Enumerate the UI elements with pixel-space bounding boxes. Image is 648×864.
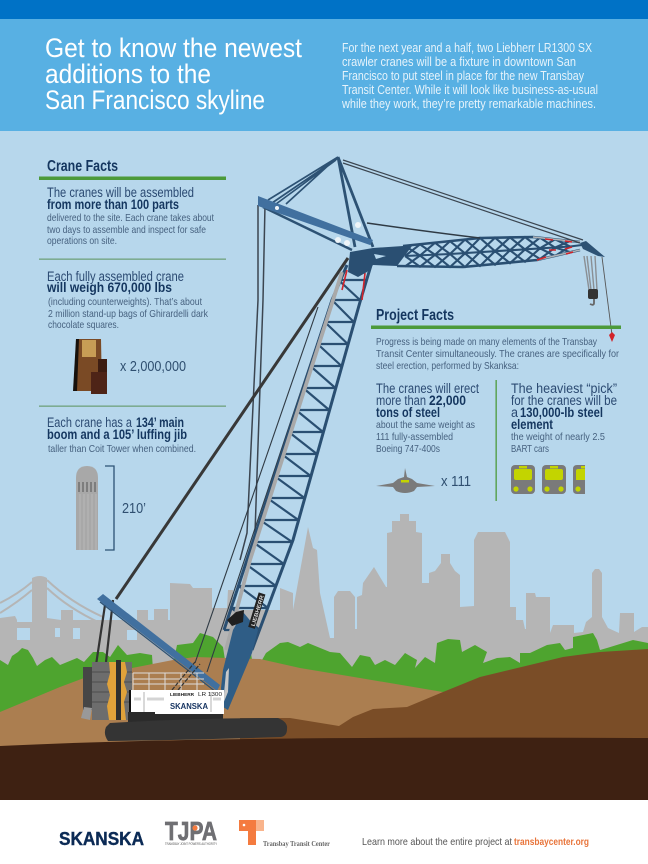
fact: tons of steel <box>376 381 479 455</box>
jib silver chords <box>533 237 580 260</box>
fact: tons of steel: more than <box>376 393 426 408</box>
jib tip <box>580 241 605 257</box>
jib red accents <box>537 239 590 260</box>
heading rule <box>371 326 621 329</box>
title <box>45 33 302 115</box>
fact: weight: 2 million stand-up bags of Ghirardelli dark <box>48 308 209 320</box>
project intro: steel erection, performed by Skanksa: <box>376 360 519 372</box>
heading rule <box>39 176 226 180</box>
header panel <box>0 19 648 131</box>
spreader underside <box>100 602 216 692</box>
ground: dark soil <box>0 738 648 801</box>
crane body: SKANSKA <box>170 702 208 711</box>
boom guy lines <box>195 307 328 672</box>
boom maker label <box>248 592 266 629</box>
title: San Francisco skyline <box>45 85 265 115</box>
project intro: Progress is being made on many elements of the Transbay <box>376 336 598 348</box>
fact: heaviest pick: for the cranes will be <box>511 393 617 408</box>
track frame <box>128 712 223 722</box>
fact: parts: two days to assemble and inspect for safe <box>47 224 206 236</box>
intro paragraph: Transit Center. While it will look like business-as-usual <box>342 83 598 97</box>
fact: weight <box>46 269 209 331</box>
railing <box>133 673 204 690</box>
fact: heaviest pick: the weight of nearly 2.5 <box>511 431 605 443</box>
hook block <box>584 256 598 305</box>
intro paragraph: For the next year and a half, two Liebherr LR1300 SX <box>342 41 593 55</box>
fact: weight: Each fully assembled crane <box>47 269 184 284</box>
title: Get to know the newest <box>45 33 302 63</box>
green bushes <box>0 633 648 730</box>
crane <box>81 157 615 741</box>
ground: tan hill <box>0 657 443 760</box>
luffing jib lattice <box>397 237 582 267</box>
fact: tons of steel: 111 fully-assembled <box>376 431 453 443</box>
logo: transbay transit center <box>239 820 331 848</box>
ground: brown hill <box>240 649 648 760</box>
fact: weight: (including counterweights). That’s about <box>48 296 202 308</box>
learn more: Learn more about the entire project at <box>362 836 512 848</box>
fact: parts: from more than 100 parts <box>47 197 179 212</box>
main boom lattice <box>224 262 372 650</box>
top band <box>0 0 648 19</box>
boom base <box>221 612 258 710</box>
fact: tons of steel: tons of steel <box>376 405 440 420</box>
count: airplanes: x 111 <box>441 474 471 490</box>
fact: tons of steel: 22,000 <box>429 393 466 408</box>
tower height: 210’ <box>122 501 146 517</box>
panel: project facts <box>371 307 621 501</box>
icon: coit tower <box>76 466 98 550</box>
title: additions to the <box>45 59 211 89</box>
fact: heaviest pick: The heaviest “pick” <box>511 381 617 396</box>
bridge openings <box>17 620 137 640</box>
fact: parts: operations on site. <box>47 235 117 247</box>
heading: project facts: Project Facts <box>376 307 454 324</box>
black fitting <box>227 610 244 626</box>
crane body <box>129 690 224 714</box>
fact: heaviest pick: a <box>511 405 518 420</box>
footer <box>0 800 648 864</box>
fact: height: taller than Coit Tower when combined. <box>48 443 196 455</box>
icon: airplane <box>376 468 435 493</box>
fact: heaviest pick: BART cars <box>511 443 549 455</box>
icon: chocolate bag <box>73 339 107 394</box>
boom red accents <box>342 270 365 300</box>
logo: TJPA: TJPA <box>165 816 217 846</box>
bridge cables <box>0 580 103 623</box>
fact: height <box>47 415 196 455</box>
backstay <box>116 258 348 599</box>
boom silver chord <box>226 272 342 650</box>
project intro <box>376 336 619 372</box>
logo: transbay transit center: Transbay Transit Center <box>263 839 331 848</box>
jib stay <box>367 223 480 238</box>
hub <box>348 248 373 277</box>
bracket <box>105 466 114 550</box>
sheaves <box>275 206 361 246</box>
hub window <box>374 254 386 259</box>
panel: crane facts <box>39 158 226 550</box>
lower spreader <box>97 594 220 691</box>
fact: height: 134’ main <box>136 415 184 430</box>
gantry legs <box>96 600 113 665</box>
fact: tons of steel: Boeing 747-400s <box>376 443 440 455</box>
intro paragraph <box>341 41 598 111</box>
rear pendants <box>240 205 265 560</box>
learn more: transbaycenter.org <box>514 836 589 848</box>
fact: height: boom and a 105’ luffing jib <box>47 427 187 442</box>
boom base plate <box>223 668 229 704</box>
intro paragraph: while they work, they’re pretty remarkable machines. <box>341 97 596 111</box>
fact: height: Each crane has a <box>47 415 132 430</box>
count: chocolate bags: x 2,000,000 <box>120 359 186 375</box>
sky background <box>0 131 648 801</box>
spreader bar <box>258 196 373 245</box>
fact: heaviest pick: element <box>511 417 553 432</box>
logo: skanska: SKANSKA <box>59 829 144 849</box>
jib root <box>373 246 412 266</box>
counterweights <box>81 660 132 720</box>
fact: heaviest pick: 130,000-lb steel <box>520 405 603 420</box>
crane body: LR 1300 <box>198 692 222 698</box>
heading: crane facts: Crane Facts <box>47 158 118 175</box>
intro paragraph: Francisco to put steel in place for the new Transbay <box>342 69 585 83</box>
logo: TJPA: TRANSBAY JOINT POWERS AUTHORITY <box>165 842 218 846</box>
boom maker label: LIEBHERR <box>251 595 266 627</box>
A-frame <box>263 157 373 250</box>
red hook line <box>602 257 615 342</box>
fact: tons of steel: about the same weight as <box>376 419 475 431</box>
fact: parts <box>47 185 214 247</box>
crawler track <box>105 718 287 741</box>
stair braces <box>172 662 200 690</box>
fact: parts: The cranes will be assembled <box>47 185 194 200</box>
fact: parts: delivered to the site. Each crane takes about <box>47 212 214 224</box>
icon: BART cars <box>511 465 585 494</box>
skyline <box>0 514 648 710</box>
crane body: LIEBHERR <box>170 692 195 698</box>
fact: weight: will weigh 670,000 lbs <box>46 280 172 295</box>
fact: heaviest pick <box>511 381 617 455</box>
fact: weight: chocolate squares. <box>48 319 119 331</box>
pendant lines <box>343 160 583 243</box>
fact: tons of steel: The cranes will erect <box>376 381 479 396</box>
intro paragraph: crawler cranes will be a fixture in downtown San <box>342 55 576 69</box>
divider <box>496 380 497 501</box>
